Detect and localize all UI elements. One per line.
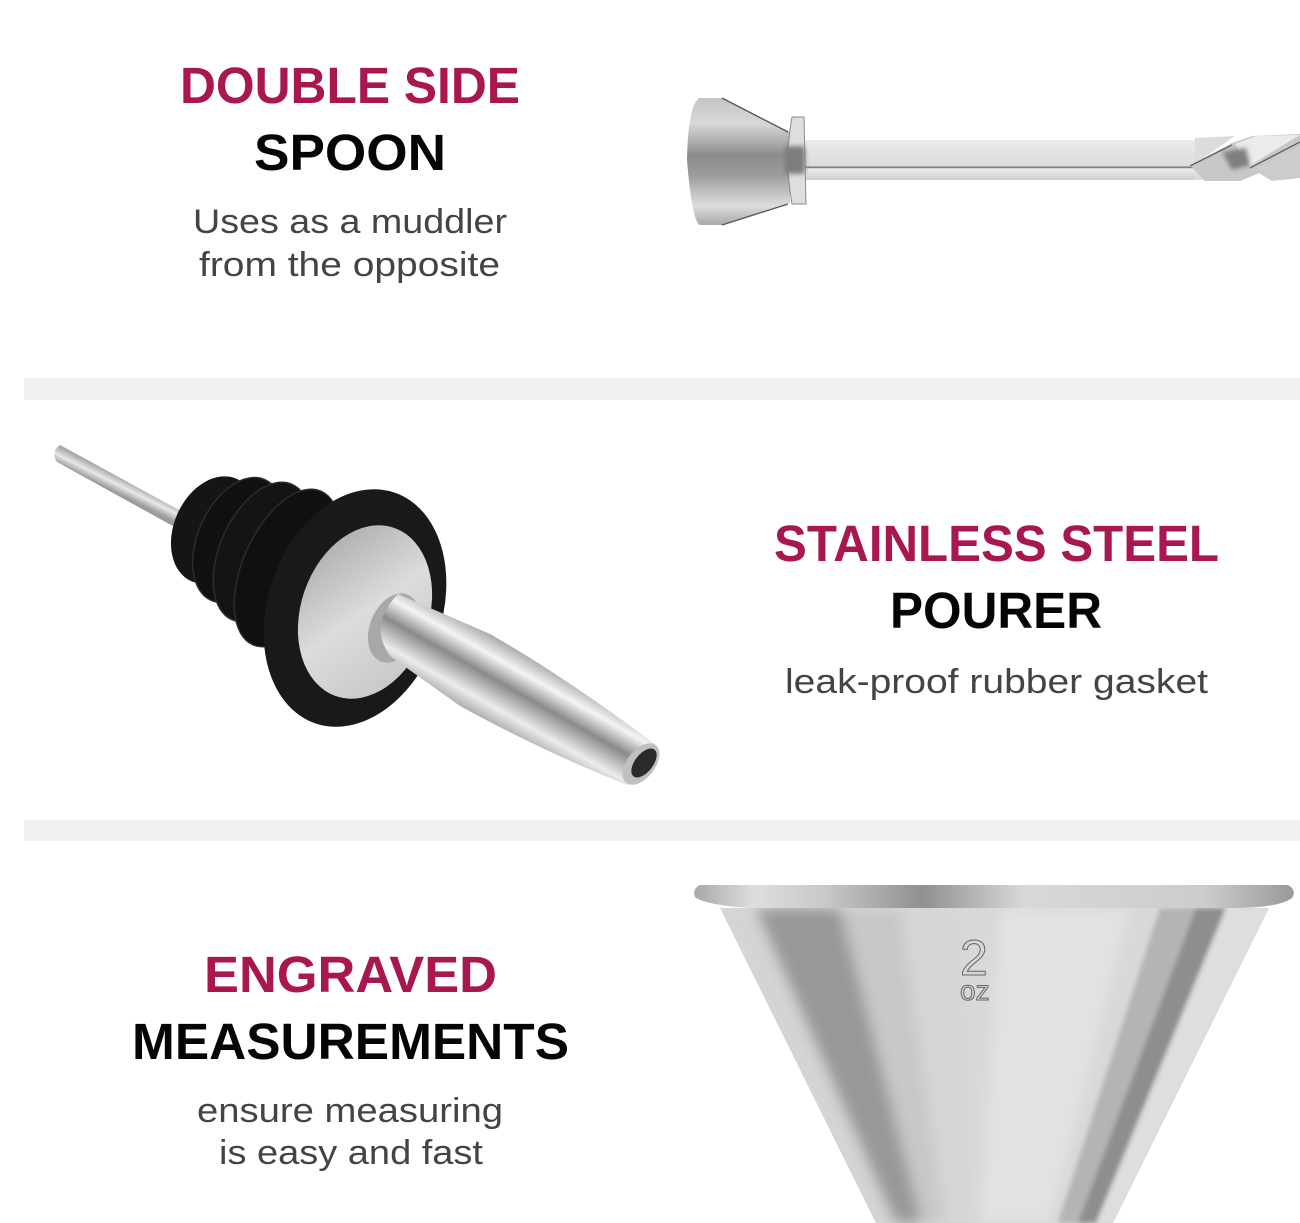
- panel: engraved measurements text: [132, 946, 569, 1172]
- heading: stainless steel: STAINLESS STEEL: [774, 515, 1219, 572]
- panel: double side spoon text: [180, 57, 520, 284]
- description: spoon: [193, 203, 507, 284]
- pourer thin rod: [54, 445, 190, 530]
- panel: stainless steel pourer text: [774, 515, 1219, 701]
- engraved 2 oz marking: 2: [960, 930, 988, 986]
- jigger rim: [694, 885, 1294, 908]
- rubber ridged stopper: [155, 463, 361, 663]
- description: measuring: [197, 1092, 503, 1172]
- spoon rod: [804, 134, 1300, 181]
- engraved 2 oz marking: oz: [960, 975, 990, 1006]
- icon: bottle pourer: [54, 445, 667, 792]
- jigger cone body: [720, 908, 1269, 1223]
- engraved 2 oz marking: [960, 930, 990, 1006]
- heading: spoon: SPOON: [254, 124, 446, 181]
- heading: engraved: ENGRAVED: [204, 946, 497, 1003]
- rubber gasket: [233, 464, 477, 752]
- muddler head: [687, 98, 790, 225]
- heading: pourer: POURER: [890, 582, 1102, 639]
- icon: steel jigger: [694, 885, 1300, 1223]
- steel cap: [276, 507, 454, 717]
- description: measuring: is easy and fast: [219, 1134, 484, 1172]
- muddler collar: [788, 117, 806, 204]
- divider band: upper: [24, 378, 1300, 400]
- heading: double side: DOUBLE SIDE: [180, 57, 520, 114]
- heading: measurements: MEASUREMENTS: [132, 1013, 569, 1070]
- description: measuring: ensure measuring: [197, 1092, 503, 1130]
- description: spoon: Uses as a muddler: [193, 203, 507, 241]
- divider band: lower: [24, 820, 1300, 841]
- description: pourer: leak-proof rubber gasket: [785, 663, 1209, 701]
- icon: spoon muddler end: [687, 98, 1300, 225]
- description: spoon: from the opposite: [199, 246, 500, 284]
- pourer spout: [358, 586, 667, 792]
